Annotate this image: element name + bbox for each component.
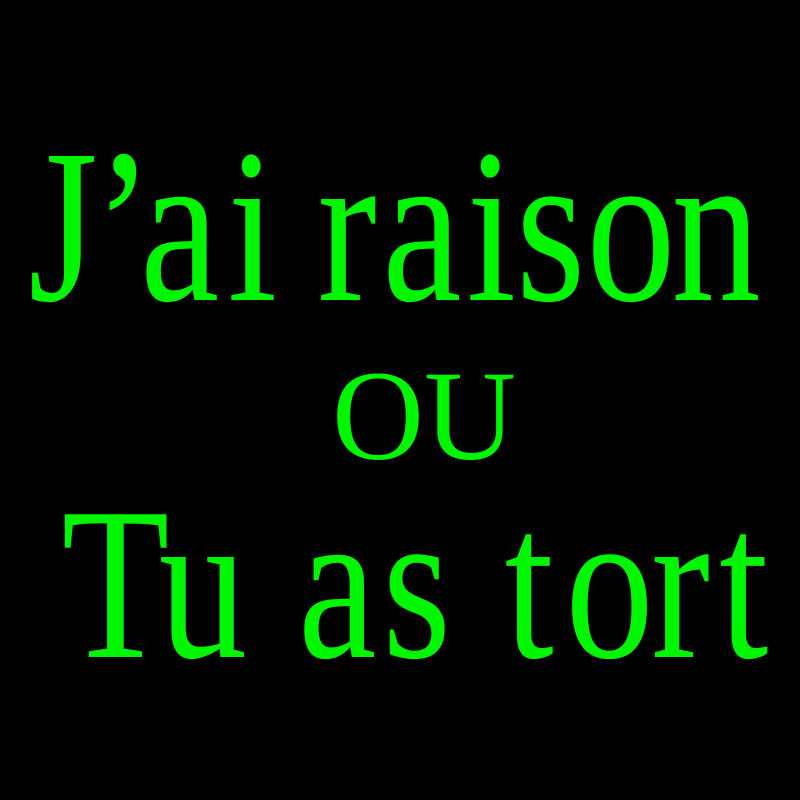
heading: J'ai raison: J’ai raison <box>28 105 761 348</box>
text: ou: OU <box>332 345 516 487</box>
heading: Tu as tort: Tu as tort <box>62 462 768 704</box>
